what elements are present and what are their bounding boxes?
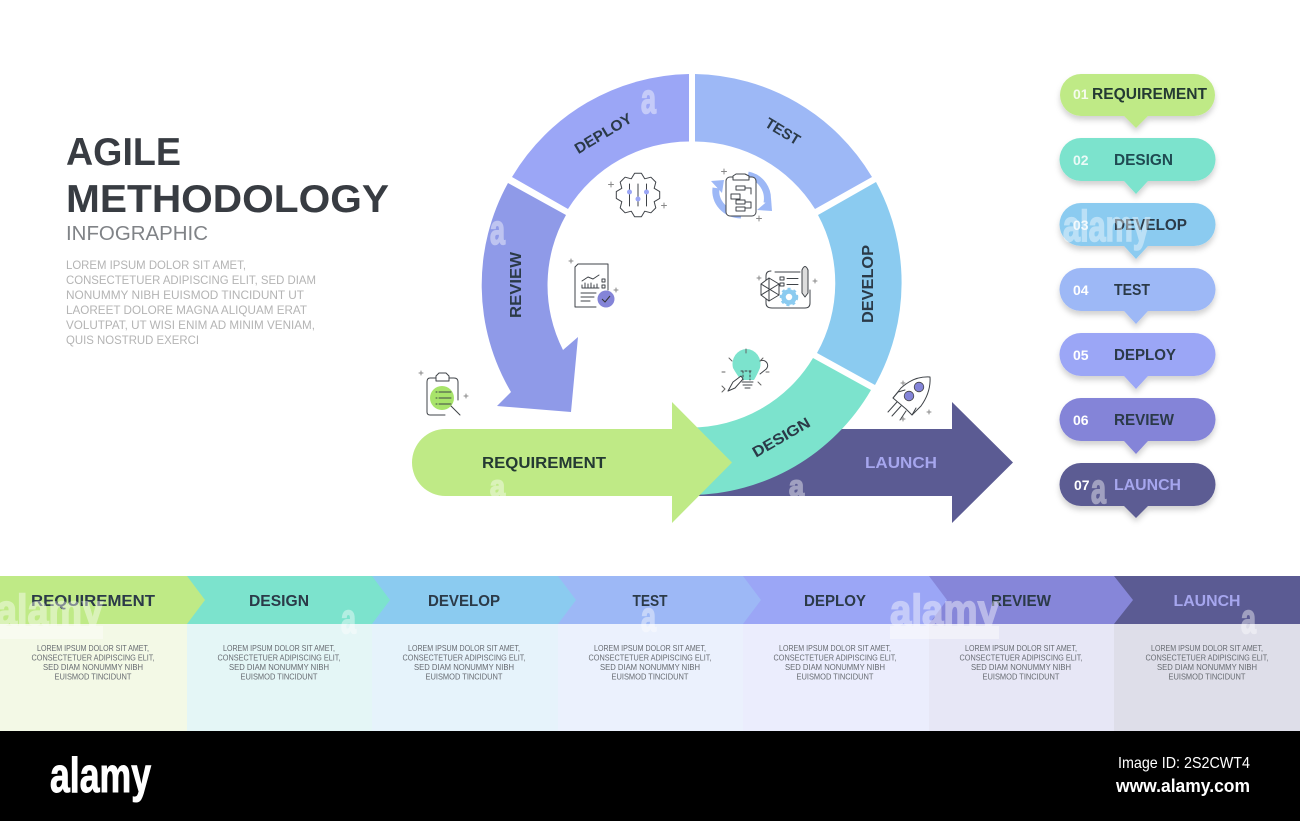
pill 05: DEPLOY [1114, 347, 1176, 364]
watermarks: a [341, 595, 356, 642]
pill 07: 07 [1074, 477, 1090, 493]
pill 07: LAUNCH [1114, 477, 1181, 494]
icon: develop blueprint [757, 266, 817, 308]
watermarks: a [641, 75, 656, 122]
icon: launch rocket [888, 377, 931, 421]
pill 02: 02 [1073, 152, 1089, 168]
intro text: VOLUTPAT, UT WISI ENIM AD MINIM VENIAM, [66, 318, 315, 332]
pill 01: REQUIREMENT [1092, 86, 1207, 103]
intro text: NONUMMY NIBH EUISMOD TINCIDUNT UT [66, 288, 305, 302]
segment: deploy [512, 74, 689, 209]
panel text: CONSECTETUER ADIPISCING ELIT, [960, 652, 1082, 662]
title block [66, 131, 389, 347]
segment: develop [817, 182, 902, 385]
pill 01: 01 [1073, 86, 1089, 102]
watermarks: a [1091, 465, 1106, 512]
subtitle: INFOGRAPHIC [66, 223, 208, 245]
cycle diagram [412, 74, 1013, 523]
segment: design: DESIGN [750, 415, 813, 461]
panel text: EUISMOD TINCIDUNT [796, 672, 874, 682]
icon: design lightbulb [722, 349, 769, 392]
panel text: LOREM IPSUM DOLOR SIT AMET, [37, 643, 149, 653]
panel text [32, 643, 1268, 682]
arrow: launch: LAUNCH [865, 455, 937, 472]
panel text: SED DIAM NONUMMY NIBH [43, 662, 143, 672]
title: AGILE [66, 131, 181, 174]
panel text: CONSECTETUER ADIPISCING ELIT, [32, 652, 154, 662]
panel text: LOREM IPSUM DOLOR SIT AMET, [408, 643, 520, 653]
title: METHODOLOGY [66, 178, 389, 221]
panel text: CONSECTETUER ADIPISCING ELIT, [774, 652, 896, 662]
watermarks: a [490, 470, 505, 503]
panel text: EUISMOD TINCIDUNT [426, 672, 502, 682]
icon: requirement clipboard [419, 371, 468, 415]
panel text: EUISMOD TINCIDUNT [240, 672, 318, 682]
pill 06: 06 [1073, 412, 1089, 428]
pill 02 [1060, 138, 1216, 194]
panel text: CONSECTETUER ADIPISCING ELIT, [402, 652, 526, 662]
panel text: EUISMOD TINCIDUNT [982, 672, 1060, 682]
watermarks [0, 75, 1256, 642]
panel text: LOREM IPSUM DOLOR SIT AMET, [779, 643, 891, 653]
watermarks: a [490, 206, 505, 253]
segment: design [690, 358, 871, 495]
pill 06 [1060, 398, 1216, 454]
segment: review arrow: REVIEW [508, 251, 525, 318]
intro text: LOREM IPSUM DOLOR SIT AMET, [66, 258, 246, 272]
panel text: CONSECTETUER ADIPISCING ELIT, [1146, 652, 1268, 662]
chevron labels: LAUNCH [1174, 593, 1240, 610]
pill 03: 03 [1073, 217, 1089, 233]
icon: test clipboard [711, 169, 772, 221]
chevron labels: REQUIREMENT [31, 593, 155, 610]
footer logo: alamy [50, 749, 151, 803]
pill 03 [1060, 203, 1216, 259]
panel text: LOREM IPSUM DOLOR SIT AMET, [223, 643, 335, 653]
intro text: QUIS NOSTRUD EXERCI [66, 333, 199, 347]
chevron headers [0, 576, 1300, 624]
pill 02: DESIGN [1114, 152, 1173, 169]
chevron labels: TEST [632, 593, 668, 610]
bottom process band [0, 576, 1300, 731]
pill 04: TEST [1114, 282, 1150, 299]
icon: deploy gear [608, 173, 666, 217]
panel text: SED DIAM NONUMMY NIBH [229, 662, 329, 672]
watermarks: a [789, 470, 804, 503]
panel text: SED DIAM NONUMMY NIBH [414, 662, 514, 672]
panel text: EUISMOD TINCIDUNT [612, 672, 688, 682]
pill 07 [1060, 463, 1216, 518]
watermarks: a [641, 593, 656, 640]
panel text: CONSECTETUER ADIPISCING ELIT, [218, 652, 340, 662]
pill 06: REVIEW [1114, 412, 1175, 429]
title [66, 131, 389, 221]
footer bar [0, 731, 1300, 821]
pill 01 [1060, 74, 1215, 128]
panel text: LOREM IPSUM DOLOR SIT AMET, [594, 643, 706, 653]
footer url: www.alamy.com [1115, 776, 1250, 796]
panel text: LOREM IPSUM DOLOR SIT AMET, [965, 643, 1077, 653]
panel text: SED DIAM NONUMMY NIBH [1157, 662, 1257, 672]
intro text: LAOREET DOLORE MAGNA ALIQUAM ERAT [66, 303, 308, 317]
pill 04: 04 [1073, 282, 1089, 298]
chevron labels: DESIGN [249, 593, 309, 610]
arrow: requirement [412, 402, 732, 523]
panel bodies [0, 624, 1300, 731]
icon: review report [569, 259, 618, 308]
intro text: CONSECTETUER ADIPISCING ELIT, SED DIAM [66, 273, 316, 287]
watermarks: a [1241, 595, 1256, 642]
panel text: EUISMOD TINCIDUNT [54, 672, 132, 682]
segment: test [695, 74, 872, 209]
chevron labels [31, 593, 1240, 610]
pill 05: 05 [1073, 347, 1089, 363]
arrow: launch [690, 402, 1013, 523]
chevron labels: DEPLOY [804, 593, 866, 610]
panel text: EUISMOD TINCIDUNT [1168, 672, 1246, 682]
image id: Image ID: 2S2CWT4 [1118, 755, 1250, 772]
panel text: LOREM IPSUM DOLOR SIT AMET, [1151, 643, 1263, 653]
legend pills [1060, 74, 1216, 518]
panel text: SED DIAM NONUMMY NIBH [600, 662, 700, 672]
intro text [66, 258, 316, 347]
chevron labels: REVIEW [991, 593, 1052, 610]
panel text: SED DIAM NONUMMY NIBH [785, 662, 885, 672]
pill 03: DEVELOP [1114, 217, 1187, 234]
segment: develop: DEVELOP [860, 245, 877, 323]
panel text: CONSECTETUER ADIPISCING ELIT, [588, 652, 712, 662]
watermarks: alamy [1063, 202, 1150, 251]
segment: review arrow [482, 183, 578, 412]
arrow: requirement: REQUIREMENT [482, 455, 606, 472]
segment: test: TEST [762, 115, 803, 149]
pill 05 [1060, 333, 1216, 389]
segment: deploy: DEPLOY [572, 110, 635, 158]
watermarks: alamy [890, 586, 999, 635]
pill 04 [1060, 268, 1216, 324]
panel text: SED DIAM NONUMMY NIBH [971, 662, 1071, 672]
chevron labels: DEVELOP [428, 593, 500, 610]
